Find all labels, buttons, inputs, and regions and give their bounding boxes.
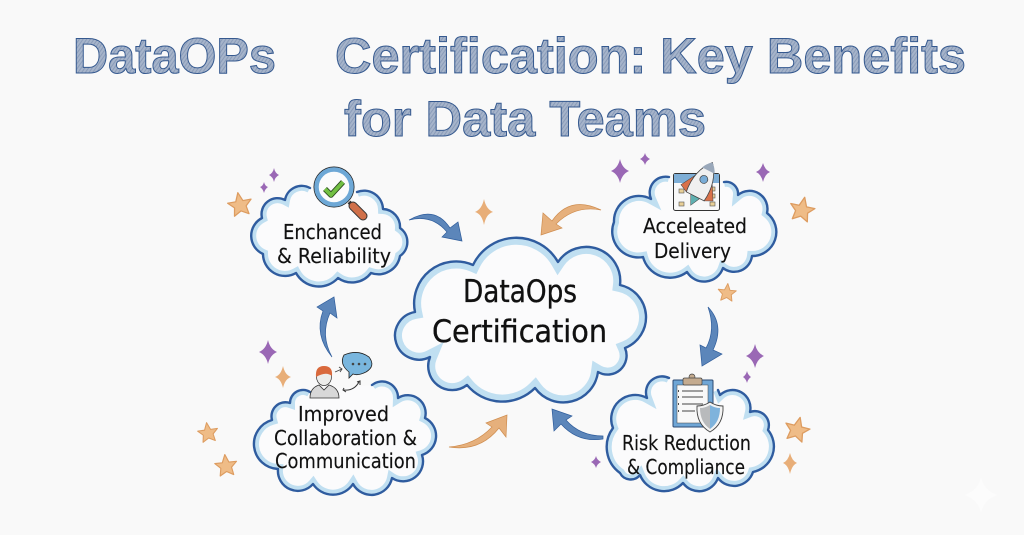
faint corner sparkle (964, 477, 998, 513)
title: Certification: Key Benefits (335, 28, 966, 84)
title: for Data Teams (344, 91, 706, 147)
cloud: Risk Reduction & Compliance: & Compliance (627, 455, 745, 479)
cloud: Risk Reduction & Compliance (607, 376, 774, 491)
central cloud: DataOps Certification (395, 238, 646, 402)
icon: clipboard with shield (673, 374, 723, 432)
cloud: Improved Collaboration & Communication: Collaboration & (274, 426, 417, 450)
cloud: Enchanced & Reliability: & Reliability (277, 244, 391, 268)
title (73, 28, 966, 147)
icon: magnifier with check (314, 167, 363, 216)
decorative sparkles (259, 153, 797, 474)
title: DataOPs (73, 28, 276, 84)
decorative stars (197, 191, 817, 476)
cloud: Improved Collaboration & Communication: Communication (275, 449, 416, 473)
arrow: Improved Collaboration to centre (449, 415, 507, 448)
cloud: Risk Reduction & Compliance: Risk Reduction (622, 431, 751, 455)
icon: rocket over calendar (674, 154, 728, 213)
cloud: Acceleated Delivery (612, 177, 776, 282)
cloud: Improved Collaboration & Communication: Improved (298, 402, 389, 426)
arrow: Acceleated Delivery to centre (541, 205, 601, 235)
arrow: Acceleated Delivery to Risk Reduction (700, 307, 722, 366)
central cloud: DataOps Certification: Certification (432, 314, 607, 350)
arrow: Improved Collaboration to Enchanced (317, 297, 337, 357)
cloud: Improved Collaboration & Communication (254, 381, 436, 495)
cloud: Enchanced & Reliability (251, 186, 407, 286)
cloud: Acceleated Delivery: Acceleated (643, 214, 747, 238)
icon: person with speech bubble (310, 352, 372, 398)
arrow: Enchanced to centre (409, 214, 462, 241)
cloud: Enchanced & Reliability: Enchanced (283, 220, 382, 244)
cloud: Acceleated Delivery: Delivery (654, 239, 731, 263)
arrow: Risk Reduction to centre (552, 409, 603, 440)
central cloud: DataOps Certification: DataOps (463, 274, 577, 310)
